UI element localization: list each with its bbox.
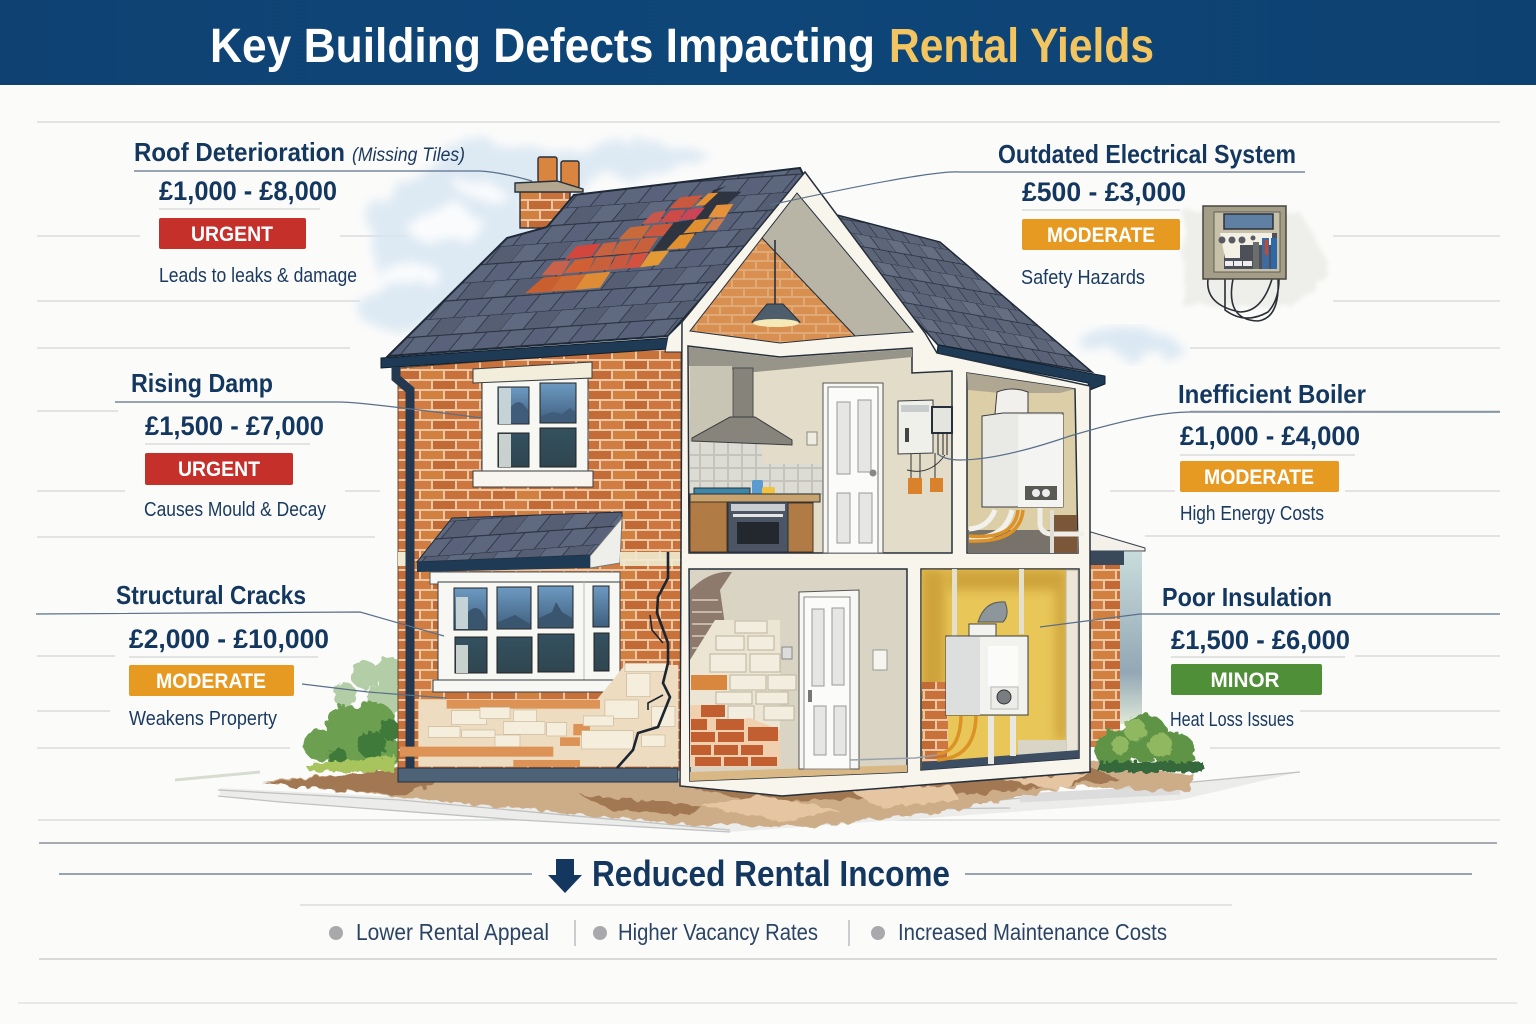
badge: MINOR xyxy=(1210,669,1280,692)
lower boiler xyxy=(946,636,1028,715)
badge: MODERATE xyxy=(1047,224,1155,247)
switch xyxy=(807,432,817,445)
callout: roof deterioration xyxy=(134,137,532,287)
icon: electrical panel xyxy=(1203,206,1286,321)
callout: inefficient boiler xyxy=(938,379,1500,525)
ground and pavement xyxy=(175,760,1300,832)
cost: £2,000 - £10,000 xyxy=(129,624,329,654)
heading: Structural Cracks xyxy=(116,580,306,610)
brick wall xyxy=(398,348,681,770)
crumbling damp stonework xyxy=(400,663,678,767)
description: High Energy Costs xyxy=(1180,503,1324,525)
downpipe xyxy=(396,367,410,776)
background rule lines xyxy=(37,122,1500,820)
second leader line xyxy=(302,684,446,698)
cost: £1,500 - £6,000 xyxy=(1171,625,1350,655)
badge xyxy=(1180,461,1339,492)
title: Key Building Defects Impacting xyxy=(210,20,875,73)
leader line xyxy=(770,172,1305,205)
badge: URGENT xyxy=(191,223,273,246)
heading: Inefficient Boiler xyxy=(1178,379,1366,409)
description: Weakens Property xyxy=(129,708,277,730)
interior door xyxy=(799,590,859,769)
callout: poor insulation xyxy=(850,582,1500,760)
bay window xyxy=(417,512,680,692)
title: Rental Yields xyxy=(889,20,1154,73)
extractor hood xyxy=(692,368,792,445)
second leader line xyxy=(850,755,937,760)
icon: structural crack xyxy=(617,552,670,768)
upper window xyxy=(473,362,593,487)
worktop and cabinets xyxy=(690,494,820,552)
description: Leads to leaks & damage xyxy=(159,265,357,287)
right roof xyxy=(837,215,1092,372)
upper boiler cupboard xyxy=(967,373,1084,553)
electric meter xyxy=(898,400,952,494)
boiler body xyxy=(982,413,1063,507)
missing and damaged tiles xyxy=(525,186,742,293)
description: Safety Hazards xyxy=(1021,267,1145,289)
right shrub xyxy=(1095,714,1203,772)
leader line xyxy=(36,612,444,636)
badge xyxy=(145,453,293,485)
door xyxy=(823,383,883,553)
left shrub xyxy=(304,657,405,772)
badge xyxy=(1022,219,1180,250)
icon: down arrow xyxy=(548,859,582,893)
exposed damp patch xyxy=(690,572,796,767)
callout: outdated electrical system xyxy=(770,139,1305,289)
attic xyxy=(690,193,913,343)
cost: £1,000 - £4,000 xyxy=(1180,421,1360,451)
heading: Rising Damp xyxy=(131,368,273,398)
leader line xyxy=(938,412,1500,460)
kitchen room xyxy=(688,346,952,553)
leader line xyxy=(115,402,482,418)
cost: £1,500 - £7,000 xyxy=(145,411,324,441)
header banner xyxy=(0,0,1536,85)
callout: rising damp xyxy=(115,368,482,521)
gas pipes xyxy=(937,716,976,760)
wall string course xyxy=(398,552,407,566)
badge: MODERATE xyxy=(1204,466,1314,489)
chimney xyxy=(508,157,583,242)
qualifier: (Missing Tiles) xyxy=(352,145,465,166)
cost: £1,000 - £8,000 xyxy=(159,176,337,206)
side extension behind right wall xyxy=(1084,530,1145,747)
bullet: higher vacancy rates: Higher Vacancy Rates xyxy=(618,919,818,945)
kitchen tiles xyxy=(690,443,822,495)
house illustration xyxy=(381,157,1105,796)
heading: Outdated Electrical System xyxy=(998,139,1296,169)
badge xyxy=(1171,664,1322,695)
plinth xyxy=(398,768,678,782)
cost: £500 - £3,000 xyxy=(1022,177,1186,207)
bullet: increased maintenance costs: Increased Maintenance Costs xyxy=(898,919,1167,945)
badge xyxy=(129,665,294,696)
heading: Poor Insulation xyxy=(1162,582,1332,612)
soil xyxy=(262,760,1195,826)
panel: reduced rental income xyxy=(18,843,1517,1003)
leader line xyxy=(134,171,532,181)
impact list xyxy=(329,919,1167,946)
heading: Roof Deterioration xyxy=(134,137,345,167)
description: Heat Loss Issues xyxy=(1170,709,1294,731)
leader line xyxy=(1040,614,1500,627)
cooktop and kettle xyxy=(694,480,775,495)
sky wash clouds xyxy=(355,144,1328,358)
light switches xyxy=(782,647,887,670)
bullet: lower rental appeal: Lower Rental Appeal xyxy=(356,919,549,945)
icon: pendant lamp xyxy=(752,240,800,327)
main roof xyxy=(388,168,806,356)
badge: MODERATE xyxy=(156,670,266,693)
white section frame xyxy=(680,172,1090,796)
gutters and fascia xyxy=(381,322,1105,390)
heading: Reduced Rental Income xyxy=(592,853,950,894)
callout: structural cracks xyxy=(36,580,446,730)
flue xyxy=(978,602,1007,622)
boiler tank xyxy=(995,389,1028,414)
description: Causes Mould & Decay xyxy=(144,499,326,521)
badge xyxy=(159,218,306,249)
pipework xyxy=(969,510,1012,538)
oven xyxy=(728,502,788,552)
lower left room with damp xyxy=(689,569,907,781)
insulation room xyxy=(921,569,1079,770)
badge: URGENT xyxy=(178,458,260,481)
